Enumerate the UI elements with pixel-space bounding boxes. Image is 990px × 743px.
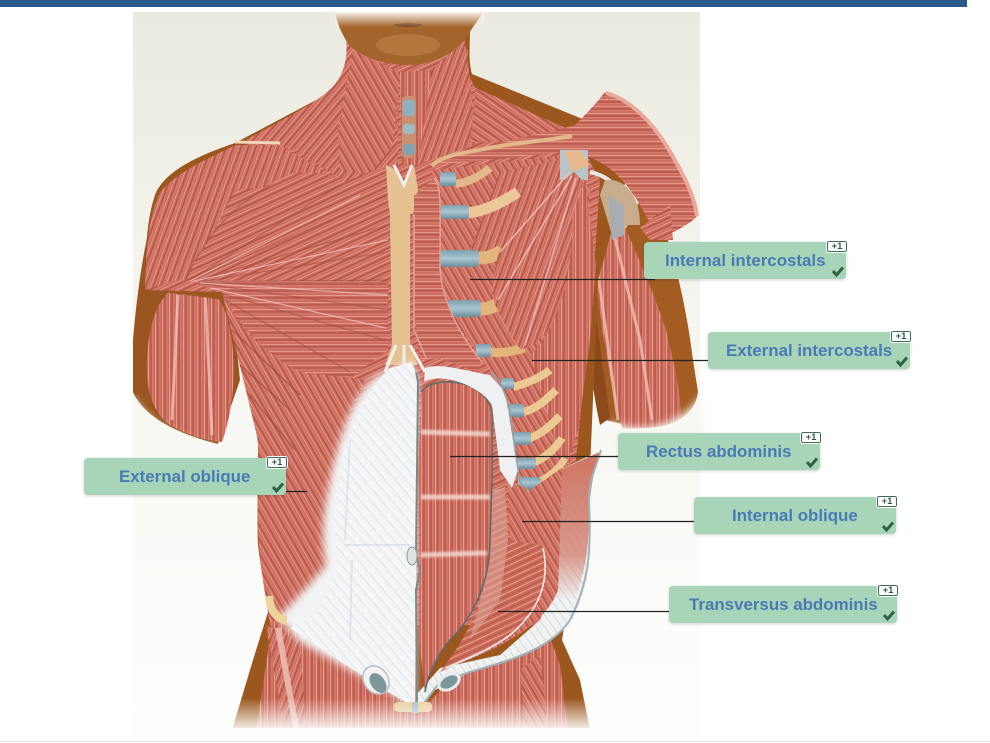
leader line: external intercostals <box>532 360 708 362</box>
label: Transversus abdominis: +1 <box>883 585 893 596</box>
left external aponeurosis <box>278 362 418 708</box>
label: Rectus abdominis: Rectus abdominis <box>646 442 791 461</box>
lower right ribs <box>501 370 565 489</box>
label: Internal oblique: Internal oblique <box>732 506 858 525</box>
right arm <box>582 178 702 450</box>
label: External oblique: +1 <box>272 457 282 468</box>
ribs <box>440 168 525 357</box>
torso silhouette <box>146 30 640 730</box>
leader line: internal oblique <box>522 520 694 522</box>
label: Internal intercostals: Internal intercostals <box>665 251 826 270</box>
reflected pectoralis flap <box>430 92 697 240</box>
label: External intercostals <box>708 332 910 369</box>
iliac tan <box>269 596 287 620</box>
top header bar <box>0 0 967 7</box>
inguinal rings <box>358 661 462 699</box>
label: External oblique: External oblique <box>119 467 250 486</box>
label: Internal oblique <box>694 497 896 534</box>
neck and trapezius muscles <box>235 38 574 185</box>
rectus abdominis <box>418 382 492 692</box>
transversus abdominis <box>440 485 545 672</box>
linea alba <box>407 366 530 705</box>
head and chin <box>335 12 485 65</box>
label: Rectus abdominis: +1 <box>806 432 816 443</box>
label: Internal intercostals <box>644 242 846 279</box>
label: Transversus abdominis: Transversus abdominis <box>689 595 878 614</box>
right serratus and pectoralis minor <box>493 172 596 470</box>
leader line: internal intercostals <box>470 278 655 280</box>
label: External intercostals: External intercostals <box>726 341 892 360</box>
shoulder tendons <box>560 150 640 240</box>
serratus and external oblique left <box>222 292 368 625</box>
muscle base over chest and abdomen <box>148 50 600 625</box>
leader line: external oblique <box>285 490 307 492</box>
label: External intercostals: +1 <box>896 331 906 342</box>
pectoral fan fibres <box>186 185 388 372</box>
internal oblique <box>445 468 562 668</box>
clavicle <box>432 136 572 166</box>
trachea <box>402 96 416 158</box>
label: Internal oblique: +1 <box>882 496 892 507</box>
left deltoid <box>145 145 340 290</box>
image background <box>133 12 700 732</box>
right aponeurosis <box>416 450 601 708</box>
label: Rectus abdominis <box>618 433 820 470</box>
sternum <box>385 165 425 375</box>
pubic symphysis <box>394 702 432 713</box>
bottom fade <box>133 698 700 732</box>
left pectoralis major <box>186 165 388 380</box>
bottom rule <box>0 741 990 742</box>
label: Transversus abdominis <box>669 586 897 623</box>
label: Internal intercostals: +1 <box>832 241 842 252</box>
right rib cage and intercostals <box>432 155 590 490</box>
label: External oblique <box>84 458 286 495</box>
leader line: rectus abdominis <box>450 456 618 458</box>
hip and thigh muscles <box>256 620 568 730</box>
rectus sheath fold <box>414 178 482 372</box>
leader line: transversus abdominis <box>498 610 669 612</box>
left arm <box>133 180 240 470</box>
